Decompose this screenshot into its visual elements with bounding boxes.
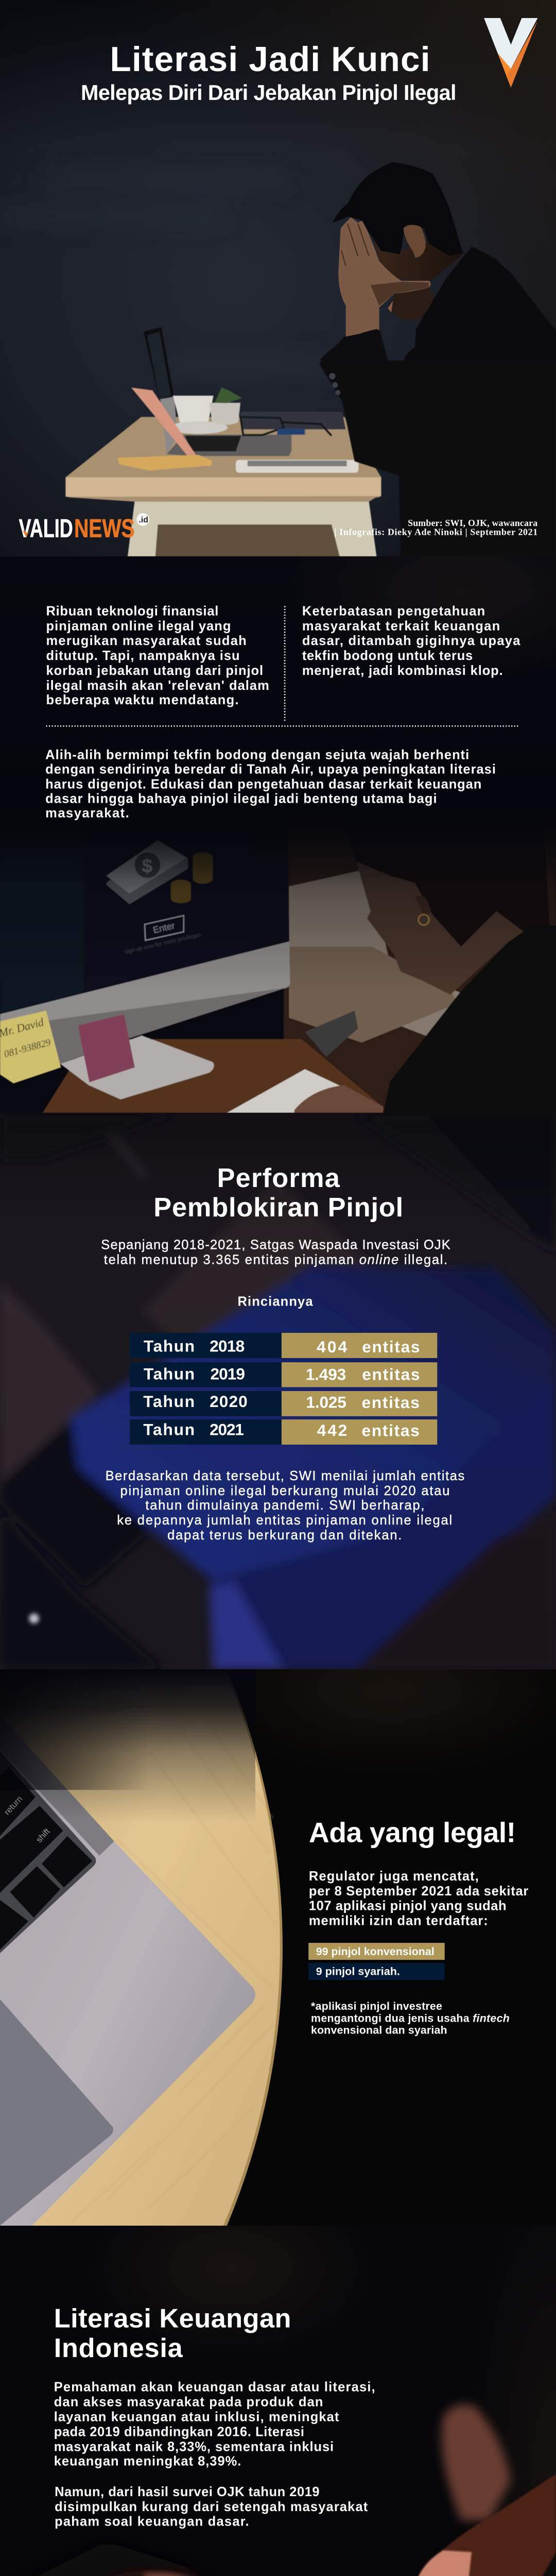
text block: regulator: per 8 September 2021 ada sekitar — [309, 1884, 528, 1899]
text block: left column: beberapa waktu mendatang. — [46, 693, 239, 707]
text block: full width paragraph — [45, 748, 496, 820]
text block: SWI assessment — [106, 1469, 464, 1543]
text block: paragraph one: keuangan meningkat 8,39%. — [54, 2454, 241, 2469]
text block: SWI assessment: ke depannya jumlah entitas pinjaman online ilegal — [117, 1513, 452, 1528]
text block: paragraph one — [54, 2380, 375, 2469]
source credit — [335, 518, 537, 537]
icon: V logo — [484, 18, 537, 88]
bar: konvensional — [308, 1943, 445, 1960]
photo: laptop on round wooden table: return — [2, 1794, 25, 1817]
row 2018: 404 — [317, 1337, 348, 1356]
text block: left column: ditutup. Tapi, nampaknya isu — [46, 649, 240, 663]
row 2019: 1.493 — [306, 1365, 346, 1384]
text block: paragraph one: masyarakat naik 8,33%, sementara inklusi — [54, 2439, 334, 2454]
heading: Pemblokiran Pinjol — [153, 1193, 403, 1223]
photo: hand touching smartphone — [0, 2155, 556, 2576]
source credit: | Infografis: Dieky Ade Ninoki | September 2021 — [335, 527, 537, 537]
text block: regulator: Regulator juga mencatat, — [309, 1869, 479, 1884]
title — [81, 40, 456, 105]
text block: SWI assessment: pinjaman online ilegal berkurang mulai 2020 atau — [120, 1484, 449, 1498]
row 2018: entitas — [362, 1337, 420, 1356]
text block: paragraph two: disimpulkan kurang dari setengah masyarakat — [55, 2500, 368, 2514]
row 2018: Tahun — [144, 1337, 195, 1355]
photo: woman at desktop computer: Enter — [152, 920, 176, 935]
row 2018: 2018 — [210, 1337, 245, 1355]
text block: right column: tekfin bodong untuk terus — [302, 649, 473, 663]
heading — [153, 1163, 403, 1223]
text block: right column: menjerat, jadi kombinasi klop. — [302, 664, 503, 678]
row 2020 — [130, 1391, 437, 1416]
text block: paragraph two: Namun, dari hasil survei OJK tahun 2019 — [55, 2485, 320, 2499]
text block: right column — [302, 604, 520, 678]
row 2021: Tahun — [143, 1420, 195, 1438]
row 2019 — [130, 1362, 437, 1387]
footnote: *aplikasi pinjol investree — [311, 2000, 442, 2012]
row 2021 — [130, 1419, 437, 1445]
text block: paragraph two — [55, 2485, 368, 2529]
row 2020: 1.025 — [306, 1393, 346, 1411]
text block: regulator: 107 aplikasi pinjol yang sudah — [309, 1899, 507, 1913]
text block: full width paragraph: dengan sendirinya beredar di Tanah Air, upaya peningkatan literasi — [45, 762, 496, 777]
row 2018 — [130, 1333, 437, 1358]
title: Literasi Jadi Kunci — [110, 40, 430, 79]
text block: right column: masyarakat terkait keuangan — [302, 619, 500, 633]
row 2019: entitas — [362, 1365, 420, 1384]
bar: syariah — [308, 1963, 445, 1980]
bar: syariah: 9 pinjol syariah. — [316, 1965, 400, 1978]
text block: SWI assessment: Berdasarkan data tersebut, SWI menilai jumlah entitas — [106, 1469, 464, 1483]
photo: blurred keyboard with blue key — [0, 1113, 556, 1669]
text block: paragraph one: dan akses masyarakat pada produk dan — [54, 2395, 323, 2410]
brand logo VALIDNEWS.id — [19, 513, 149, 543]
text block: right column: dasar, ditambah gigihnya upaya — [302, 634, 520, 648]
table: blocked entities per year — [130, 1333, 437, 1445]
text block: full width paragraph: harus digenjot. Edukasi dan pengetahuan dasar terkait keuangan — [45, 777, 481, 791]
text block: summary: Sepanjang 2018-2021, Satgas Waspada Investasi OJK — [101, 1238, 450, 1252]
text block: paragraph one: pada 2019 dibandingkan 2016. Literasi — [54, 2425, 304, 2439]
photo: woman at desktop computer: $ — [142, 855, 153, 876]
text block: paragraph two: paham soal keuangan dasar. — [55, 2515, 249, 2529]
panel: intro text over computer photo — [0, 556, 556, 1113]
text block: full width paragraph: dasar hingga bahaya pinjol ilegal jadi benteng utama bagi — [45, 792, 437, 806]
heading: Indonesia — [54, 2333, 183, 2363]
photo: laptop on round wooden table — [0, 1669, 283, 2226]
source credit: Sumber: SWI, OJK, wawancara — [408, 518, 537, 528]
text block: right column: Keterbatasan pengetahuan — [302, 604, 485, 618]
row 2019: Tahun — [144, 1364, 195, 1383]
text block: paragraph one: Pemahaman akan keuangan dasar atau literasi, — [54, 2380, 375, 2395]
desk scene illustration — [65, 327, 381, 556]
text block: left column: Ribuan teknologi finansial — [46, 604, 218, 618]
heading: Ada yang legal! — [309, 1816, 516, 1848]
brand logo VALIDNEWS.id: .id — [138, 516, 148, 524]
text block: SWI assessment: dapat terus berkurang dan ditekan. — [167, 1528, 402, 1543]
photo: woman at desktop computer: 081-938829 — [3, 1037, 52, 1060]
photo: woman at desktop computer: sign up now for more privileges — [124, 931, 202, 955]
text block: left column: ilegal masih akan 'relevan' dalam — [46, 679, 269, 693]
row 2021: 2021 — [210, 1420, 244, 1438]
heading: Performa — [217, 1163, 340, 1193]
text block: left column: pinjaman online ilegal yang — [46, 619, 231, 633]
subheading: Rinciannya — [237, 1295, 313, 1309]
bar: konvensional: 99 pinjol konvensional — [316, 1945, 435, 1958]
photo: laptop on round wooden table: shift — [34, 1826, 52, 1844]
row 2020: entitas — [362, 1393, 420, 1412]
row 2020: Tahun — [143, 1392, 195, 1411]
panel: literasi keuangan indonesia — [0, 2226, 556, 2576]
panel: cover with title and desk photo — [0, 0, 556, 556]
title: Melepas Diri Dari Jebakan Pinjol Ilegal — [81, 81, 456, 105]
brand logo VALIDNEWS.id: NEWS — [74, 514, 135, 543]
text block: left column — [46, 604, 269, 707]
row 2021: 442 — [317, 1421, 347, 1439]
text block: SWI assessment: tahun dimulainya pandemi. SWI berharap, — [145, 1498, 424, 1513]
footnote: mengantongi dua jenis usaha fintech — [311, 2012, 510, 2025]
text block: full width paragraph: Alih-alih bermimpi tekfin bodong dengan sejuta wajah berhenti — [45, 748, 469, 762]
text block: full width paragraph: masyarakat. — [45, 806, 129, 820]
text block: regulator: memiliki izin dan terdaftar: — [309, 1914, 488, 1928]
text block: summary — [101, 1238, 450, 1267]
text block: summary: telah menutup 3.365 entitas pinjaman online illegal. — [104, 1252, 447, 1267]
row 2019: 2019 — [210, 1364, 245, 1383]
heading — [54, 2304, 291, 2363]
text block: paragraph one: layanan keuangan atau inklusi, meningkat — [54, 2410, 339, 2425]
brand logo VALIDNEWS.id: VALID — [19, 514, 73, 543]
man holding his head — [319, 162, 556, 556]
footnote: konvensional dan syariah — [311, 2024, 447, 2036]
heading: Literasi Keuangan — [54, 2304, 291, 2334]
footnote — [311, 2000, 510, 2036]
panel: ada yang legal — [0, 1669, 556, 2226]
text block: left column: korban jebakan utang dari pinjol — [46, 664, 263, 678]
text block: regulator — [309, 1869, 528, 1928]
row 2021: entitas — [362, 1421, 420, 1439]
text block: left column: merugikan masyarakat sudah — [46, 634, 247, 648]
photo: woman at desktop computer — [0, 805, 556, 1113]
panel: performa pemblokiran pinjol — [0, 1113, 556, 1669]
row 2020: 2020 — [210, 1392, 248, 1411]
